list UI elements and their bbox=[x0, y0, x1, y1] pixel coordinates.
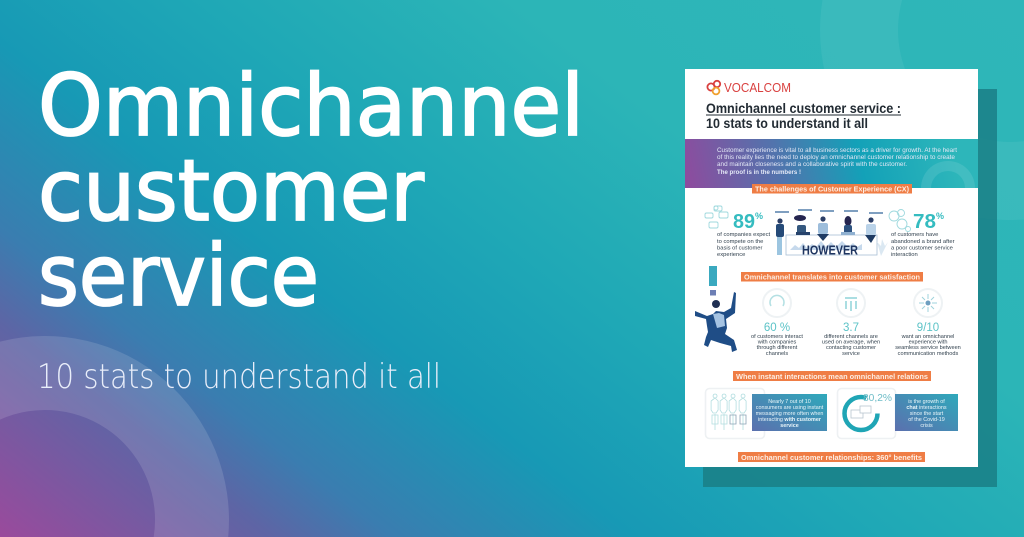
document shadow bbox=[703, 89, 997, 487]
intro band: The proof is in the numbers ! bbox=[717, 170, 801, 176]
card: messaging: service bbox=[780, 423, 799, 429]
stat: 89%: of companies expect bbox=[717, 232, 771, 238]
however box bbox=[786, 235, 877, 255]
section label: instant interactions: When instant interactions mean omnichannel relations bbox=[736, 372, 928, 381]
stat: 60%: channels bbox=[766, 351, 788, 357]
text box bbox=[895, 394, 958, 431]
stat: 89%: 89 bbox=[733, 211, 755, 233]
stat: 78% bbox=[889, 210, 955, 258]
stat: 9/10 bbox=[895, 289, 961, 357]
stat: 89%: basis of customer bbox=[717, 246, 762, 252]
icon: chat bubbles bbox=[705, 206, 728, 228]
stat: 9/10: seamless service between bbox=[895, 345, 961, 351]
card: messaging: Nearly 7 out of 10 bbox=[768, 399, 811, 405]
decorative ring bottom left bbox=[0, 336, 229, 537]
progress ring bbox=[844, 397, 878, 430]
card: chat growth: of the Covid-19 bbox=[908, 417, 945, 423]
word however: HOWEVER bbox=[802, 242, 859, 258]
stat: 3.7: different channels are bbox=[824, 334, 878, 340]
document title bbox=[706, 101, 901, 131]
main heading: service bbox=[38, 227, 319, 326]
stat: 3.7: used on average, when bbox=[822, 340, 880, 346]
icon: exclamation mark bbox=[709, 266, 717, 296]
intro band: Customer experience is vital to all business sectors as a driver for growth. At the heart bbox=[717, 148, 957, 154]
card: chat growth: chat interactions bbox=[906, 405, 947, 411]
intro band: of this reality lies the need to deploy an omnichannel customer relationship to create bbox=[717, 155, 956, 161]
intro band bbox=[685, 139, 978, 188]
section label: satisfaction: Omnichannel translates into customer satisfaction bbox=[744, 272, 920, 282]
decorative ring top right bbox=[820, 0, 1024, 220]
card: messaging bbox=[706, 388, 827, 438]
icon: channels bbox=[837, 289, 865, 317]
main heading: Omnichannel bbox=[38, 57, 584, 156]
stat: 78%: of customers have bbox=[891, 232, 938, 238]
stat: 9/10: 9/10 bbox=[917, 322, 939, 334]
icon: headset bbox=[763, 289, 791, 317]
stat: 60%: of customers interact bbox=[751, 334, 803, 340]
stat: 60%: 60 % bbox=[764, 322, 790, 334]
stat: 89%: % bbox=[755, 211, 763, 221]
document page bbox=[685, 69, 978, 467]
card outline bbox=[838, 388, 896, 438]
stat: 89% bbox=[705, 206, 771, 258]
stat: 60%: with companies bbox=[757, 340, 796, 346]
subtitle: 10 stats to understand it all bbox=[37, 357, 441, 397]
stat: 78%: % bbox=[936, 211, 944, 221]
card: messaging: interacting with customer bbox=[758, 417, 822, 423]
document title: Omnichannel customer service : bbox=[706, 101, 901, 116]
illustration: HOWEVER team bbox=[775, 209, 888, 258]
stat: 78%: abandoned a brand after bbox=[891, 239, 955, 245]
plant bbox=[877, 239, 888, 256]
card: chat growth: crisis bbox=[920, 423, 933, 429]
icon: network bbox=[914, 289, 942, 317]
stat: 3.7 bbox=[822, 289, 880, 357]
stat: 60% bbox=[751, 289, 803, 357]
logo: Vocalcom: VOCALCOM bbox=[724, 81, 791, 95]
section label: challenges: The challenges of Customer Experience (CX) bbox=[755, 184, 909, 194]
stat: 60%: through different bbox=[757, 345, 798, 351]
people bbox=[776, 215, 876, 255]
intro band: and maintain closeness and a collaborative spirit with the customer. bbox=[717, 162, 907, 168]
chat icon bbox=[851, 406, 871, 418]
stat: 78%: a poor customer service bbox=[891, 246, 953, 252]
document title: 10 stats to understand it all bbox=[706, 116, 868, 131]
card: chat growth: since the start bbox=[910, 411, 944, 417]
stat: 3.7: 3.7 bbox=[843, 322, 859, 334]
card: messaging: messaging more often when bbox=[756, 411, 823, 417]
speech labels bbox=[775, 209, 883, 214]
card: chat growth bbox=[838, 388, 958, 438]
stat: 3.7: contacting customer bbox=[826, 345, 876, 351]
card: chat growth: is the growth of bbox=[908, 399, 945, 405]
stat: 9/10: want an omnichannel bbox=[901, 334, 954, 340]
stat: 9/10: communication methods bbox=[898, 351, 959, 357]
stat: 9/10: experience with bbox=[909, 340, 947, 346]
stat: 78%: interaction bbox=[891, 252, 918, 258]
text box bbox=[752, 394, 827, 431]
stat: 78%: 78 bbox=[913, 211, 936, 233]
value: 80,2% bbox=[863, 393, 892, 404]
people grid bbox=[706, 388, 764, 438]
stat: 89%: to compete on the bbox=[717, 239, 763, 245]
main heading: customer bbox=[38, 142, 424, 241]
main heading bbox=[38, 57, 584, 326]
stat: 3.7: service bbox=[842, 351, 860, 357]
card: messaging: consumers are using instant bbox=[756, 405, 824, 411]
illustration: jumping man bbox=[695, 292, 737, 352]
waves bbox=[790, 241, 862, 250]
icon: linked bubbles bbox=[889, 210, 910, 232]
section label: benefits: Omnichannel customer relationships: 360° benefits bbox=[741, 453, 922, 462]
stat: 89%: experience bbox=[717, 252, 745, 258]
infographic document bbox=[685, 69, 978, 467]
